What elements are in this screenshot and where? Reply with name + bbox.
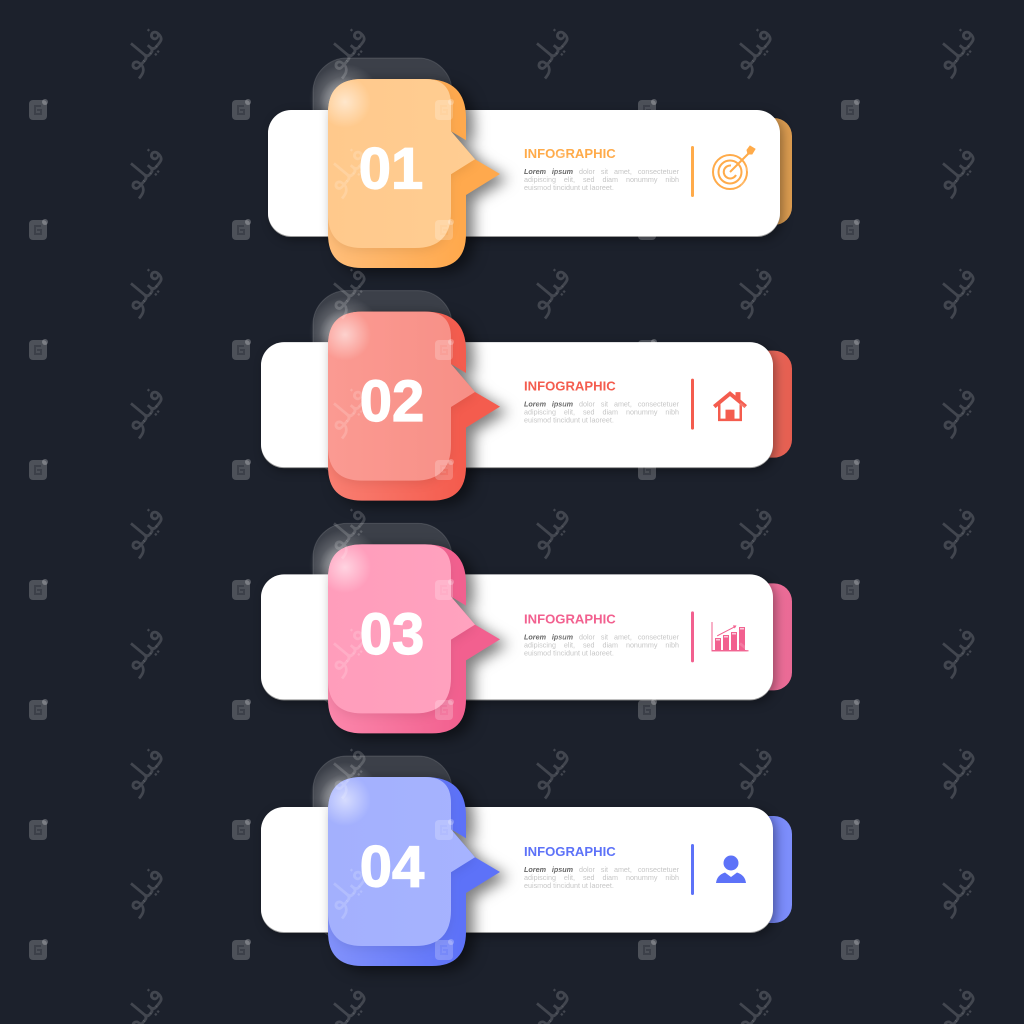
watermark overlay: فیلو [316, 259, 376, 320]
number: 03 [360, 602, 424, 667]
number: 02 [360, 369, 424, 434]
text block: adipiscing elit, sed diam nonummy nibh [524, 175, 679, 184]
speech bubble back [328, 544, 500, 733]
watermark overlay: فیلو [925, 739, 985, 800]
watermark overlay: فیلو [113, 379, 173, 440]
watermark overlay: فیلو [113, 619, 173, 680]
watermark overlay: فیلو [722, 739, 782, 800]
glass panel [309, 58, 452, 243]
white card [261, 807, 773, 932]
watermark overlay: فیلو [722, 19, 782, 80]
watermark overlay: فیلو [722, 859, 782, 920]
divider bar [691, 379, 694, 430]
text block: euismod tincidunt ut laoreet. [524, 649, 614, 658]
text block: adipiscing elit, sed diam nonummy nibh [524, 408, 679, 417]
watermark overlay: فیلو [925, 379, 985, 440]
back tab [700, 583, 792, 690]
watermark overlay: فیلو [316, 19, 376, 80]
watermark overlay: فیلو [519, 379, 579, 440]
watermark overlay: فیلو [722, 619, 782, 680]
watermark overlay: فیلو [925, 499, 985, 560]
highlight [319, 309, 371, 361]
watermark overlay: فیلو [925, 139, 985, 200]
text block: euismod tincidunt ut laoreet. [524, 416, 614, 425]
text block: euismod tincidunt ut laoreet. [524, 881, 614, 890]
divider bar [691, 146, 694, 197]
text block [524, 866, 680, 893]
glass panel [309, 523, 452, 708]
watermark overlay: فیلو [519, 19, 579, 80]
back tab [700, 351, 792, 458]
highlight [319, 774, 371, 826]
watermark overlay: فیلو [316, 499, 376, 560]
highlight [319, 76, 371, 128]
text block: euismod tincidunt ut laoreet. [524, 183, 614, 192]
heading: INFOGRAPHIC [524, 146, 616, 161]
watermark overlay: فیلو [519, 499, 579, 560]
watermark overlay: فیلو [925, 619, 985, 680]
heading: INFOGRAPHIC [524, 844, 616, 859]
highlight [319, 541, 371, 593]
heading: INFOGRAPHIC [524, 611, 616, 626]
number: 04 [360, 834, 424, 900]
watermark overlay: فیلو [925, 259, 985, 320]
text block [524, 401, 680, 428]
watermark overlay: فیلو [316, 139, 376, 200]
watermark overlay: فیلو [113, 739, 173, 800]
watermark overlay: فیلو [925, 859, 985, 920]
watermark overlay: فیلو [722, 259, 782, 320]
speech bubble back [328, 777, 500, 966]
icon: person [716, 856, 746, 883]
speech bubble back [328, 312, 500, 501]
back tab [700, 816, 792, 923]
number: 01 [359, 136, 423, 202]
row 4: step 04 [261, 756, 792, 966]
icon: target with arrow [713, 146, 755, 189]
divider bar [691, 611, 694, 662]
icon: house [713, 391, 747, 421]
watermark overlay: فیلو [519, 139, 579, 200]
watermark overlay: فیلو [722, 139, 782, 200]
heading: INFOGRAPHIC [524, 379, 616, 394]
watermark overlay: فیلو [519, 859, 579, 920]
row 1: step 01 [268, 58, 792, 268]
row 3: step 03 [261, 523, 792, 733]
logo mark overlay [29, 99, 860, 960]
white card [261, 574, 773, 699]
watermark overlay: فیلو [925, 19, 985, 80]
watermark overlay: فیلو [316, 379, 376, 440]
speech bubble front [328, 79, 475, 248]
white card [268, 110, 780, 236]
text block: adipiscing elit, sed diam nonummy nibh [524, 641, 679, 650]
watermark overlay: فیلو [316, 739, 376, 800]
watermark overlay: فیلو [113, 139, 173, 200]
icon: bar chart [712, 622, 748, 651]
watermark overlay: فیلو [316, 859, 376, 920]
divider bar [691, 844, 694, 895]
speech bubble front [328, 777, 475, 946]
text block [524, 168, 680, 195]
glass panel [309, 756, 452, 941]
watermark overlay: فیلو [519, 619, 579, 680]
watermark overlay: فیلو [113, 259, 173, 320]
glass panel [309, 291, 452, 476]
watermark overlay: فیلو [722, 379, 782, 440]
white card [261, 342, 773, 467]
watermark overlay: فیلو [519, 259, 579, 320]
text block [524, 633, 680, 660]
row 2: step 02 [261, 291, 792, 501]
watermark overlay: فیلو [519, 739, 579, 800]
text block: adipiscing elit, sed diam nonummy nibh [524, 873, 679, 882]
watermark overlay: فیلو [113, 859, 173, 920]
watermark overlay: فیلو [113, 499, 173, 560]
watermark overlay: فیلو [113, 19, 173, 80]
back tab [700, 118, 792, 225]
speech bubble front [328, 312, 475, 481]
speech bubble front [328, 544, 475, 713]
watermark overlay: فیلو [316, 619, 376, 680]
speech bubble back [328, 79, 500, 268]
watermark overlay: فیلو [722, 499, 782, 560]
